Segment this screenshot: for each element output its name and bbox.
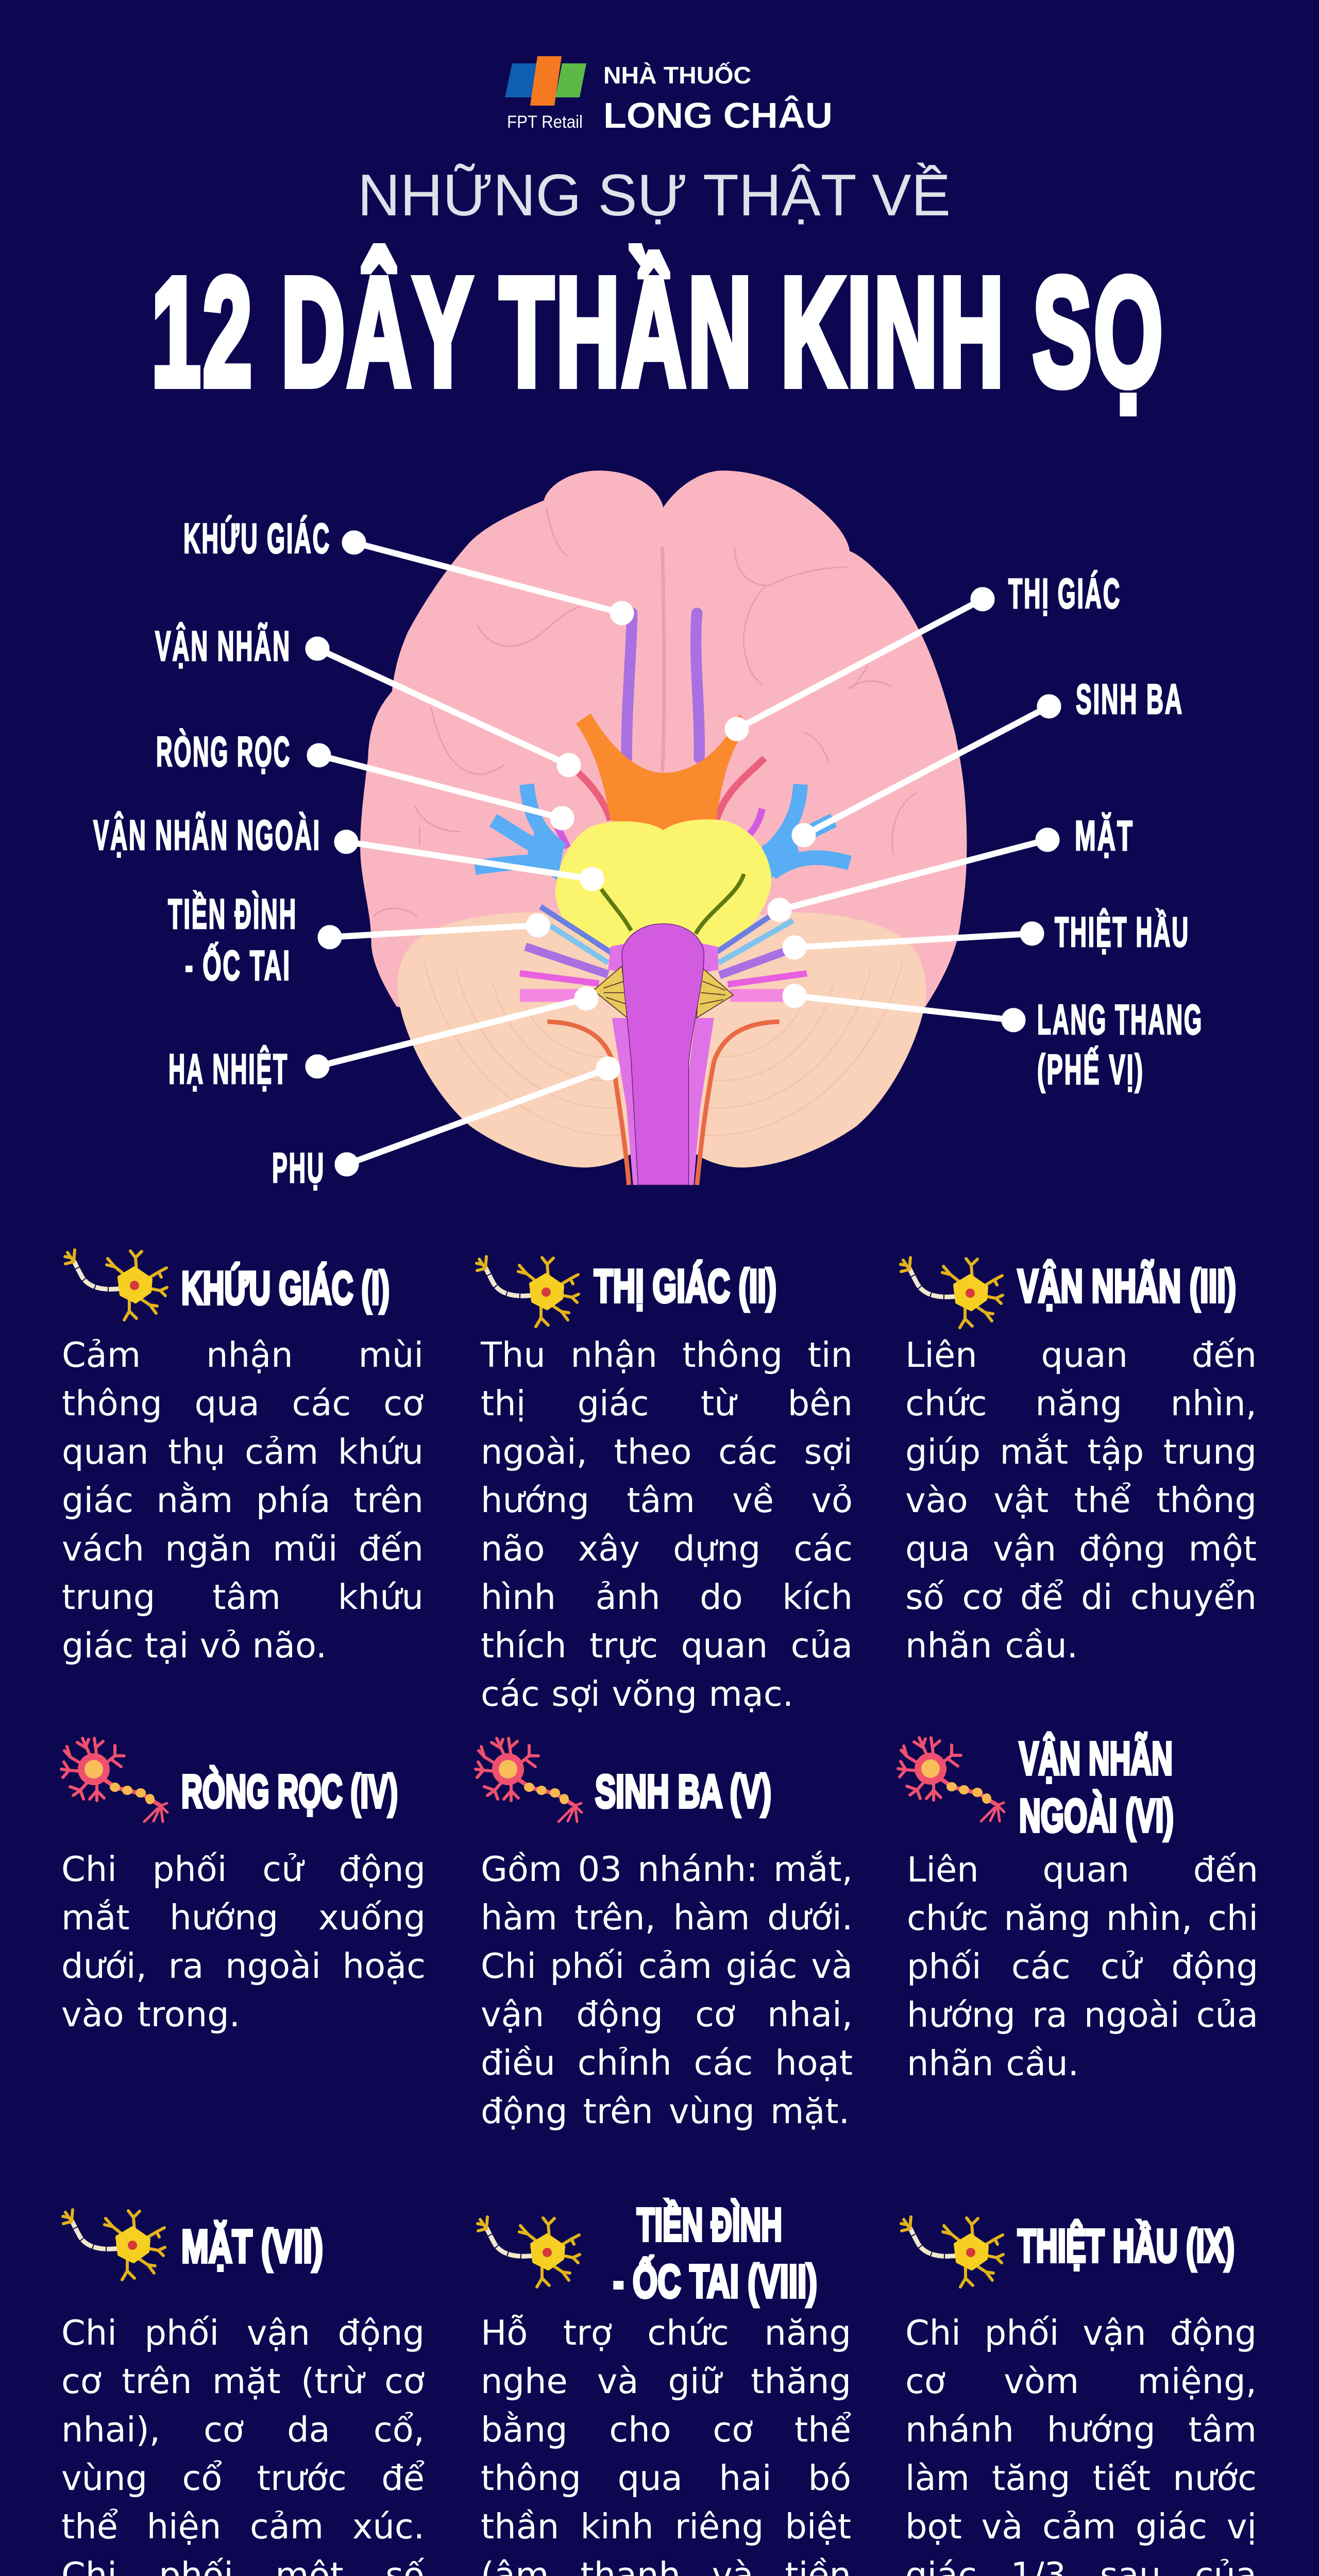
- callout: Vận nhãn: VẬN NHÃN: [155, 623, 291, 670]
- text: Ròng rọc description: mắt hướng xuống: [61, 1897, 426, 1938]
- panel: Khứu giác (I): [62, 1248, 424, 1666]
- olfactory nerve: [627, 613, 699, 758]
- text: Sinh ba description: điều chỉnh các hoạt: [481, 2043, 853, 2083]
- callout: Hạ nhiệt: [168, 987, 598, 1093]
- icon: yellow neuron: [478, 2217, 580, 2287]
- text: Thiệt hầu description: nhánh hướng tâm: [905, 2410, 1257, 2450]
- callout: Thiệt hầu: [783, 909, 1190, 959]
- text: Khứu giác description: quan thụ cảm khứu: [62, 1432, 424, 1472]
- heading: Sinh ba (V): SINH BA (V): [595, 1766, 771, 1818]
- text: Khứu giác description: vách ngăn mũi đến: [62, 1529, 424, 1569]
- text: Khứu giác description: giác tại vỏ não.: [62, 1625, 327, 1666]
- callout: Mặt: [768, 812, 1134, 922]
- icon: pink neuron: [61, 1738, 167, 1822]
- text: Vận nhãn ngoài description: chức năng nhìn, chi: [907, 1898, 1258, 1938]
- text: Sinh ba description: động trên vùng mặt.: [481, 2091, 850, 2131]
- text: Vận nhãn description: Liên quan đến: [905, 1335, 1257, 1375]
- text: Thiệt hầu description: bọt và cảm giác vị: [905, 2506, 1257, 2547]
- callout: Tiền đình - ốc tai: - ỐC TAI: [185, 942, 291, 989]
- text: Sinh ba description: Gồm 03 nhánh: mắt,: [481, 1849, 853, 1889]
- text: Thị giác description: ngoài, theo các sợi: [481, 1432, 853, 1472]
- callout: Phụ: [272, 1057, 620, 1192]
- text: Vận nhãn description: [905, 1335, 1257, 1666]
- text: Thiệt hầu description: cơ vòm miệng,: [905, 2361, 1257, 2401]
- text: Vận nhãn ngoài description: [907, 1850, 1258, 2083]
- logo: FPT Retail Nhà thuốc Long Châu: FPT Retail: [507, 112, 583, 132]
- text: Tiền đình description: bằng cho cơ thể: [481, 2410, 851, 2450]
- callout: Tiền đình - ốc tai: [168, 891, 550, 989]
- text: Ròng rọc description: dưới, ra ngoài hoặc: [61, 1946, 426, 1986]
- accessory nerve: [548, 1022, 780, 1185]
- text: Thị giác description: thích trực quan của: [481, 1625, 853, 1666]
- text: Thiệt hầu description: [905, 2313, 1257, 2576]
- text: Sinh ba description: [481, 1849, 853, 2131]
- text: Sinh ba description: vận động cơ nhai,: [481, 1994, 853, 2035]
- panel: Ròng rọc (IV): [60, 1737, 426, 2035]
- icon: yellow neuron: [63, 2210, 165, 2280]
- cerebellum: [397, 912, 926, 1167]
- text: Khứu giác description: trung tâm khứu: [62, 1577, 424, 1617]
- callout: Khứu giác: KHỨU GIÁC: [183, 515, 331, 562]
- cerebellum folds: [424, 960, 903, 1136]
- text: Vận nhãn description: số cơ để di chuyển: [905, 1577, 1257, 1617]
- text: Ròng rọc description: Chi phối cử động: [61, 1849, 426, 1889]
- panel: Thiệt hầu (IX): [900, 2215, 1257, 2576]
- ganglia: [594, 966, 733, 1018]
- icon: yellow neuron: [477, 1257, 579, 1327]
- callout: Lang thang (phế vị): (PHẾ VỊ): [1037, 1046, 1144, 1093]
- icon: pink neuron: [476, 1738, 582, 1822]
- lower nerve fans: [520, 907, 807, 995]
- callout: Vận nhãn: [155, 623, 581, 777]
- text: Vận nhãn ngoài description: phối các cử động: [907, 1946, 1258, 1987]
- icon: yellow neuron: [901, 1258, 1003, 1328]
- text: Tiền đình description: Hỗ trợ chức năng: [481, 2313, 851, 2353]
- callout: Khứu giác: [183, 515, 634, 625]
- text: Thị giác description: não xây dựng các: [481, 1529, 853, 1569]
- panel: Thị giác (II): [475, 1255, 853, 1714]
- brainstem: [622, 924, 704, 1185]
- panel: Tiền đình - ốc tai (VIII): [476, 2198, 851, 2576]
- callout: Lang thang (phế vị): [783, 984, 1203, 1093]
- panel: Vận nhãn ngoài (VI): [897, 1731, 1258, 2083]
- brain diagram: [360, 470, 967, 1185]
- text: Vận nhãn ngoài description: hướng ra ngoài của: [907, 1995, 1258, 2035]
- callout: Thiệt hầu: THIỆT HẦU: [1055, 909, 1190, 956]
- text: Khứu giác description: thông qua các cơ: [62, 1383, 424, 1423]
- cerebrum: [360, 470, 967, 1062]
- text: Tiền đình description: thần kinh riêng biệt: [481, 2506, 851, 2547]
- logo: FPT Retail Nhà thuốc Long Châu: [505, 56, 833, 135]
- text: Vận nhãn description: chức năng nhìn,: [905, 1383, 1257, 1423]
- callout: Thị giác: THỊ GIÁC: [1008, 570, 1121, 617]
- callout: Mặt: MẶT: [1075, 812, 1134, 859]
- text: Mặt description: thể hiện cảm xúc.: [61, 2506, 425, 2547]
- oculomotor nerve: [578, 758, 765, 820]
- heading: Tiền đình - ốc tai (VIII): [613, 2198, 817, 2308]
- text: Thị giác description: Thu nhận thông tin: [481, 1335, 853, 1375]
- text: Thiệt hầu description: Chi phối vận động: [905, 2313, 1257, 2353]
- callout: Sinh ba: [792, 676, 1183, 847]
- panel: Sinh ba (V): [474, 1737, 853, 2131]
- text: Khứu giác description: [62, 1335, 424, 1666]
- panel: Mặt (VII): [61, 2208, 425, 2576]
- text: Mặt description: nhai), cơ da cổ,: [61, 2410, 425, 2450]
- callout: Ròng rọc: RÒNG RỌC: [156, 728, 291, 775]
- text: Ròng rọc description: vào trong.: [61, 1994, 240, 2035]
- text: Tiền đình description: [481, 2313, 851, 2576]
- callout: Hạ nhiệt: HẠ NHIỆT: [168, 1046, 289, 1093]
- pons: [555, 819, 771, 951]
- callout: Vận nhãn ngoài: [93, 812, 604, 891]
- logo: FPT Retail Nhà thuốc Long Châu: NHÀ THUỐC: [603, 62, 751, 89]
- text: Thị giác description: các sợi võng mạc.: [481, 1674, 793, 1714]
- header and diagram area: [93, 56, 1203, 1192]
- text: Thị giác description: hướng tâm về vỏ: [481, 1480, 853, 1520]
- text: Thị giác description: hình ảnh do kích: [481, 1577, 853, 1617]
- cerebrum folds: [374, 507, 917, 917]
- text: Khứu giác description: giác nằm phía trên: [62, 1480, 424, 1520]
- medulla side strips: [608, 942, 719, 1185]
- text: Tiền đình description: nghe và giữ thăng: [481, 2361, 851, 2401]
- text: Vận nhãn ngoài description: nhãn cầu.: [907, 2043, 1079, 2083]
- title line 1: NHỮNG SỰ THẬT VỀ: [358, 163, 951, 228]
- abducens nerve: [601, 874, 744, 934]
- trochlear nerve: [557, 809, 762, 848]
- text: Mặt description: vùng cổ trước để: [61, 2458, 425, 2498]
- text: Thị giác description: thị giác từ bên: [481, 1383, 853, 1423]
- text: Vận nhãn description: nhãn cầu.: [905, 1625, 1078, 1666]
- text: Sinh ba description: hàm trên, hàm dưới.: [481, 1897, 853, 1938]
- icon: yellow neuron: [65, 1250, 167, 1320]
- callout: Vận nhãn ngoài: VẬN NHÃN NGOÀI: [93, 812, 321, 859]
- text: Vận nhãn description: giúp mắt tập trung: [905, 1432, 1257, 1472]
- callout: Tiền đình - ốc tai: TIỀN ĐÌNH: [168, 891, 297, 938]
- heading: Mặt (VII): MẶT (VII): [181, 2221, 323, 2273]
- heading: Vận nhãn ngoài (VI): [1019, 1732, 1174, 1842]
- trigeminal nerve: [475, 784, 850, 880]
- text: Mặt description: Chi phối vận động: [61, 2313, 425, 2353]
- text: Tiền đình description: thông qua hai bó: [481, 2458, 851, 2498]
- text: Thị giác description: [480, 1335, 853, 1714]
- text: Vận nhãn ngoài description: Liên quan đến: [907, 1850, 1258, 1890]
- callout: Thị giác: [725, 570, 1121, 741]
- text: Vận nhãn description: qua vận động một: [905, 1529, 1257, 1569]
- logo: FPT Retail Nhà thuốc Long Châu: LONG CHÂU: [603, 95, 833, 135]
- callout: Sinh ba: SINH BA: [1076, 676, 1183, 723]
- text: Vận nhãn description: vào vật thể thông: [905, 1480, 1257, 1520]
- text: Khứu giác description: Cảm nhận mùi: [62, 1335, 424, 1375]
- heading: Vận nhãn ngoài (VI): VẬN NHÃN: [1019, 1732, 1173, 1785]
- text: Sinh ba description: Chi phối cảm giác và: [481, 1946, 853, 1986]
- heading: Vận nhãn ngoài (VI): NGOÀI (VI): [1019, 1790, 1174, 1842]
- callout: Ròng rọc: [156, 728, 574, 830]
- text: Ròng rọc description: [61, 1849, 426, 2035]
- text: Mặt description: [61, 2313, 425, 2576]
- callout: Phụ: PHỤ: [272, 1145, 325, 1192]
- panel: Vận nhãn (III): [899, 1256, 1257, 1666]
- icon: yellow neuron: [901, 2217, 1003, 2287]
- icon: pink neuron: [898, 1738, 1004, 1821]
- optic nerve: [576, 714, 746, 834]
- text: Thiệt hầu description: làm tăng tiết nước: [905, 2458, 1257, 2498]
- text: Mặt description: cơ trên mặt (trừ cơ: [61, 2361, 425, 2401]
